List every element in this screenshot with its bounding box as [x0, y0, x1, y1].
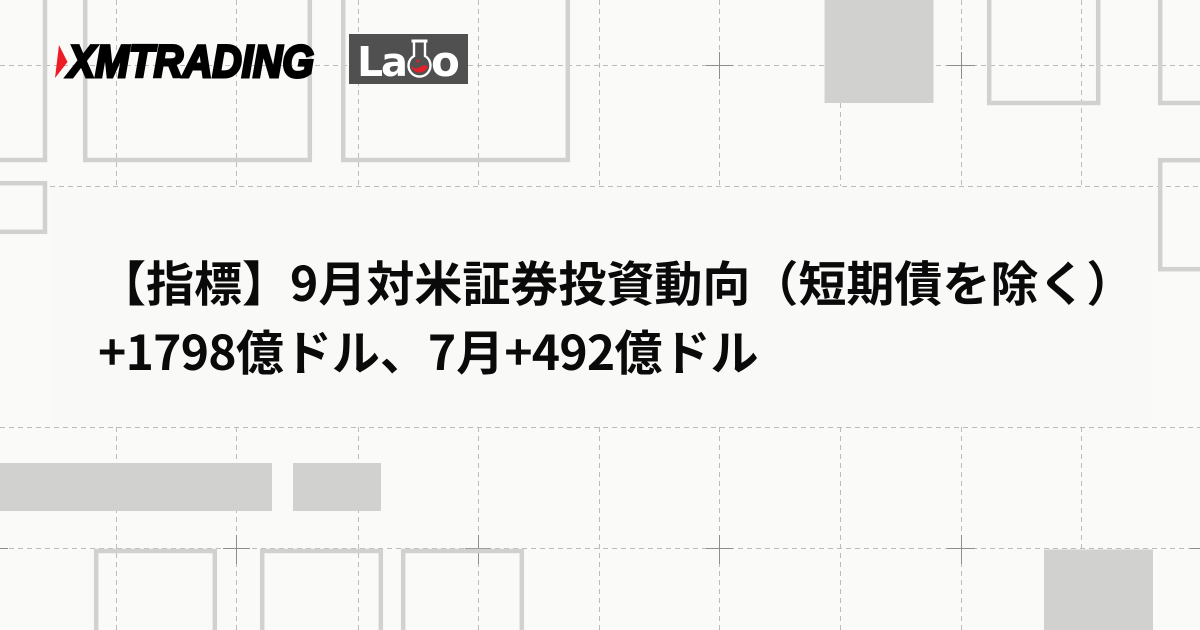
- icon: flask: [407, 41, 432, 78]
- outline box: top right edge: [1160, 0, 1200, 103]
- outline box: bottom 1: [96, 551, 215, 630]
- outline box: top left edge: [0, 0, 45, 160]
- panel: title background: [50, 187, 1152, 427]
- logo: Labo: o: [431, 37, 460, 86]
- outline box: bottom 2: [262, 551, 381, 630]
- logo: Labo: a: [381, 40, 408, 86]
- outline box: bottom 3: [403, 551, 522, 630]
- outline box: top right: [989, 0, 1098, 103]
- outline box: top centre: [343, 0, 568, 160]
- title: +1798億ドル、7月+492億ドル: [98, 314, 758, 384]
- filled block: top right: [824, 0, 934, 103]
- logo: XMTRADING: XMTRADING: [65, 36, 314, 87]
- logo: Labo: L: [357, 38, 383, 86]
- outline box: top left: [85, 0, 310, 160]
- outline box: right edge: [1160, 160, 1200, 269]
- filled bar: lower left short: [293, 463, 381, 511]
- filled block: bottom right: [1044, 550, 1153, 630]
- logo: Labo: [349, 34, 468, 86]
- title: [98, 245, 1134, 384]
- title: 【指標】9月対米証券投資動向（短期債を除く）: [98, 245, 1134, 315]
- filled bar: lower left long: [0, 463, 272, 511]
- outline box: small left: [0, 183, 45, 232]
